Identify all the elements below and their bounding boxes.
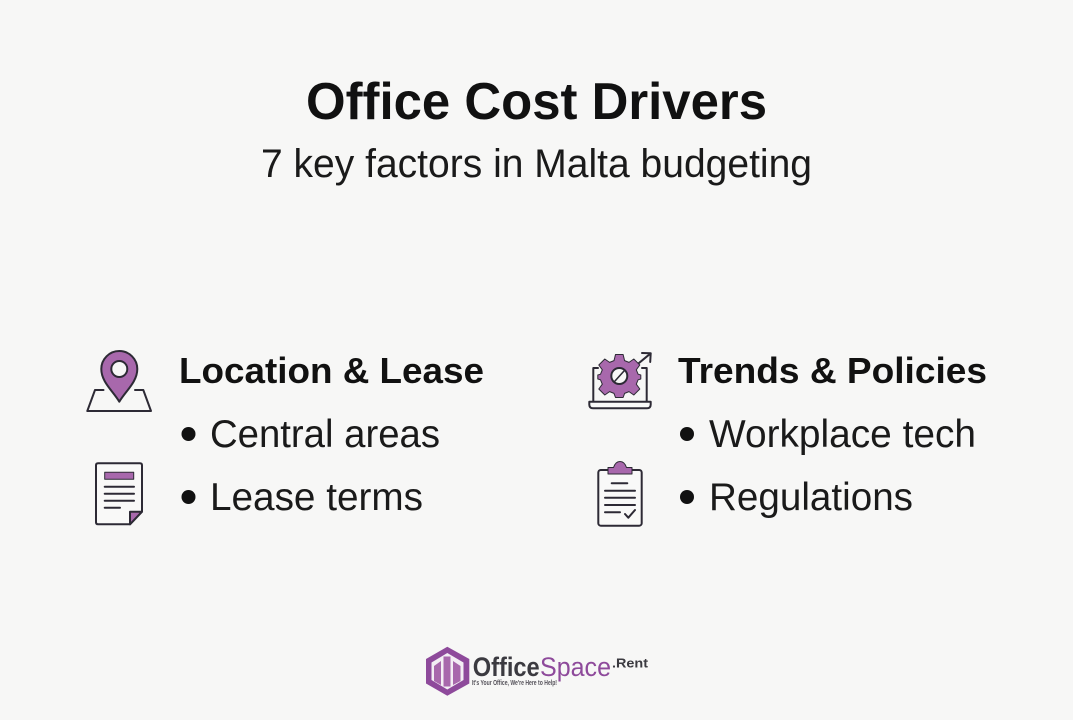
panel: trends and policies: [589, 350, 987, 526]
panel: location and lease: [87, 350, 484, 524]
icon: laptop with gear and arrow: [589, 353, 651, 408]
logo wordmark: Office: Office: [473, 652, 540, 682]
bullet: regulations: Regulations: [709, 476, 913, 519]
icon: clipboard: [598, 462, 642, 526]
heading: location and lease: Location & Lease: [179, 350, 484, 391]
icon: hexagon building mark: [426, 647, 469, 696]
logo tagline: It's Your Office, We're Here to Help!: [472, 680, 557, 687]
icon: document: [96, 463, 142, 524]
bullet: central areas: Central areas: [210, 413, 440, 456]
subtitle: 7 key factors in Malta budgeting: [261, 142, 812, 186]
icon: map pin: [87, 351, 151, 411]
logo wordmark: Space: Space: [540, 652, 611, 682]
bullet: lease terms: Lease terms: [210, 476, 423, 519]
logo wordmark: .Rent: .Rent: [612, 656, 649, 671]
logo: OfficeSpace.Rent: [426, 647, 649, 696]
gear: [598, 354, 641, 398]
bullet: workplace tech: Workplace tech: [709, 413, 976, 456]
heading: trends and policies: Trends & Policies: [678, 350, 987, 391]
title: Office Cost Drivers: [306, 73, 767, 131]
